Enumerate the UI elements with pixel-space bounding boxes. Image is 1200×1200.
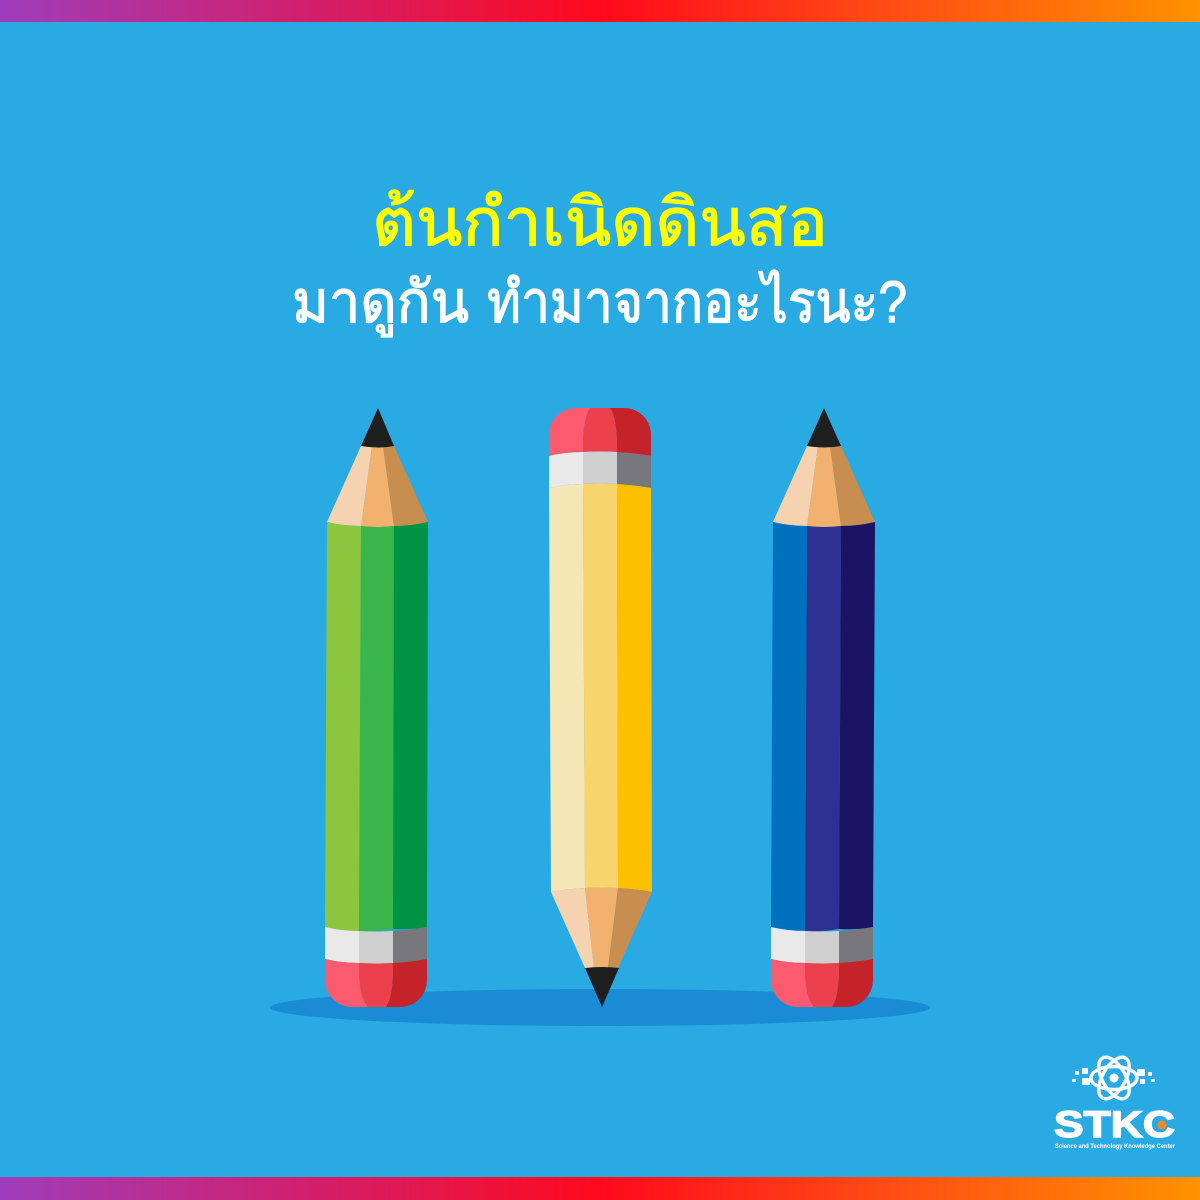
pencil: yellow bbox=[549, 408, 652, 1007]
yellow pencil ferrule bbox=[549, 452, 651, 488]
blue pencil eraser bbox=[771, 959, 873, 1007]
pencil: green bbox=[325, 408, 428, 1007]
green pencil ferrule bbox=[325, 927, 427, 964]
subtitle: ทำมาจากอะไรนะ? bbox=[487, 269, 907, 335]
icon: atom bbox=[1072, 1052, 1155, 1104]
yellow pencil eraser bbox=[549, 408, 651, 456]
yellow pencil tip bbox=[551, 888, 652, 1007]
subtitle: มาดูกัน bbox=[292, 270, 469, 337]
blue pencil ferrule bbox=[771, 927, 873, 964]
title: ต้นกำเนิดดินสอ bbox=[372, 185, 828, 259]
subtitle bbox=[292, 269, 907, 337]
green pencil eraser bbox=[325, 959, 427, 1007]
bottom gradient bar bbox=[0, 1177, 1200, 1200]
green pencil tip bbox=[327, 408, 428, 527]
blue pencil tip bbox=[773, 408, 875, 527]
pencil: blue bbox=[771, 408, 875, 1007]
logo tagline: Science and Technology Knowledge Center bbox=[1055, 1144, 1176, 1150]
ground shadow bbox=[270, 989, 930, 1026]
logo wordmark: STKC bbox=[1054, 1104, 1175, 1145]
logo orange dot bbox=[1158, 1120, 1166, 1130]
blue pencil body bbox=[771, 522, 875, 931]
logo: STKC bbox=[1054, 1052, 1176, 1150]
top gradient bar bbox=[0, 0, 1200, 22]
yellow pencil body bbox=[549, 484, 652, 892]
green pencil body bbox=[325, 522, 428, 931]
